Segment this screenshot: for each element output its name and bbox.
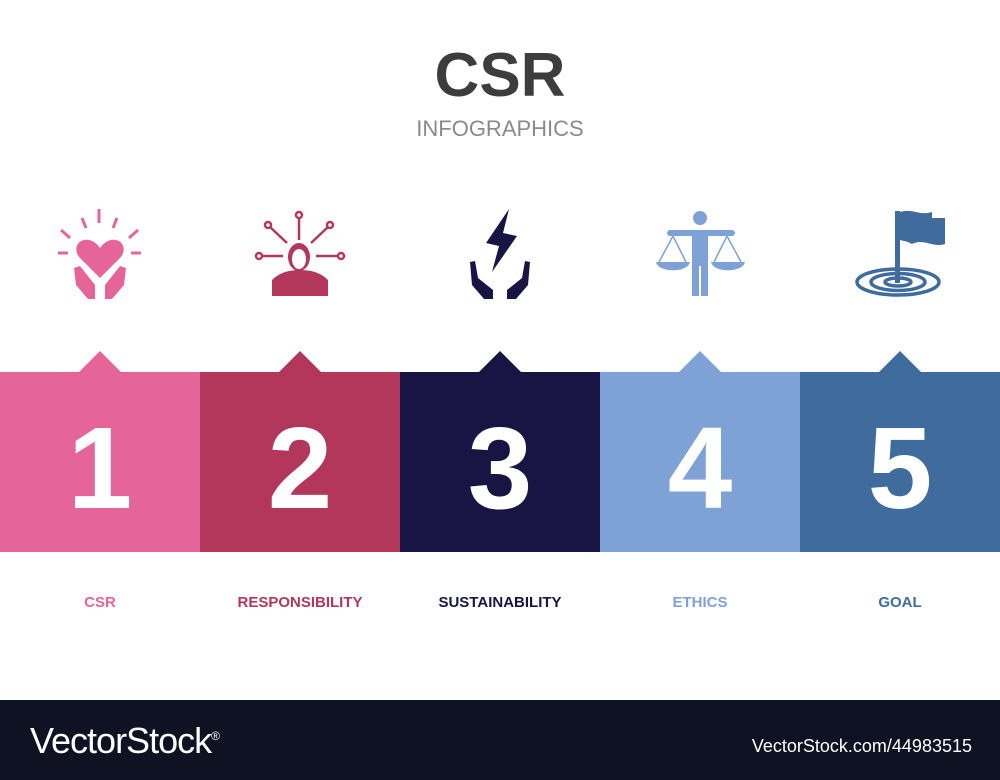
band 5 (800, 351, 1000, 552)
number 2: 2 (268, 403, 332, 533)
footer (0, 700, 1000, 780)
label CSR: CSR (84, 594, 116, 611)
subtitle: INFOGRAPHICS (416, 116, 584, 141)
label goal: GOAL (878, 594, 922, 611)
band 3 (400, 351, 600, 552)
band 4 (600, 351, 800, 552)
icon: person with scales (656, 211, 745, 296)
icon: person network (256, 212, 344, 296)
number 5: 5 (868, 403, 932, 533)
band 2 (200, 351, 400, 552)
icon: flag on target (857, 211, 945, 295)
number 4: 4 (668, 403, 732, 533)
band 1 (0, 351, 200, 552)
label sustainability: SUSTAINABILITY (438, 594, 562, 611)
footer brand: VectorStock® (30, 720, 219, 761)
icon: lightning in hands (470, 209, 530, 299)
number 3: 3 (468, 403, 532, 533)
icon: heart in hands (58, 209, 141, 299)
footer id: VectorStock.com/44983515 (752, 736, 972, 756)
number 1: 1 (68, 403, 132, 533)
label ethics: ETHICS (672, 594, 728, 611)
title: CSR (435, 41, 565, 110)
label responsibility: RESPONSIBILITY (237, 594, 363, 611)
